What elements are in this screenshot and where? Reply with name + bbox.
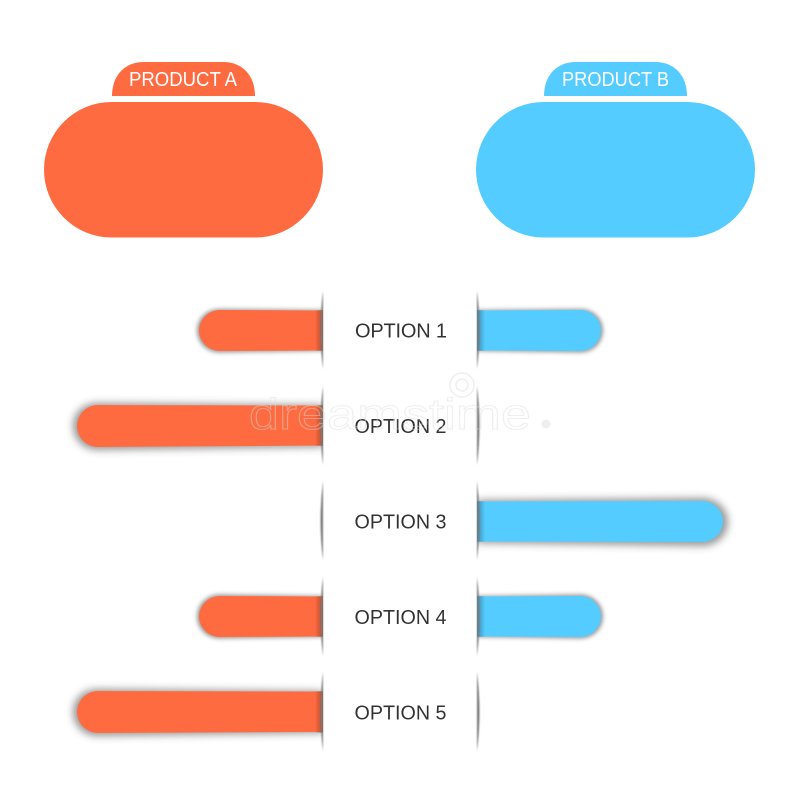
column: option cards xyxy=(320,290,480,752)
card: option 1 xyxy=(320,290,480,370)
bar: option 1 product B xyxy=(477,309,603,352)
card: option 2: OPTION 2 xyxy=(354,416,446,438)
bar: option 5 product A xyxy=(73,689,323,736)
pill: product A body xyxy=(44,102,323,238)
card: option 5 xyxy=(320,672,480,752)
pill: product B body xyxy=(476,102,755,238)
tab: product A label xyxy=(112,62,255,96)
card: option 3 xyxy=(320,481,480,561)
card: option 4: OPTION 4 xyxy=(354,607,446,629)
tab: product B label xyxy=(544,62,687,96)
watermark xyxy=(249,373,550,439)
tab: product B label: PRODUCT B xyxy=(562,69,669,91)
tab: product A label: PRODUCT A xyxy=(129,69,238,91)
bar: option 4 product A xyxy=(197,594,323,638)
watermark: dreamstime xyxy=(249,390,531,439)
card: option 3: OPTION 3 xyxy=(354,512,446,534)
bar: option 3 product B xyxy=(477,498,728,546)
card: option 4 xyxy=(320,577,480,657)
bar: option 2 product A xyxy=(73,403,323,450)
card: option 2 xyxy=(320,386,480,466)
card: option 5: OPTION 5 xyxy=(354,702,446,724)
card: option 1: OPTION 1 xyxy=(355,320,447,342)
panel: product B header xyxy=(476,62,755,238)
panel: product A header xyxy=(44,62,323,238)
bar: option 4 product B xyxy=(477,594,603,638)
bar: option 1 product A xyxy=(197,309,323,352)
